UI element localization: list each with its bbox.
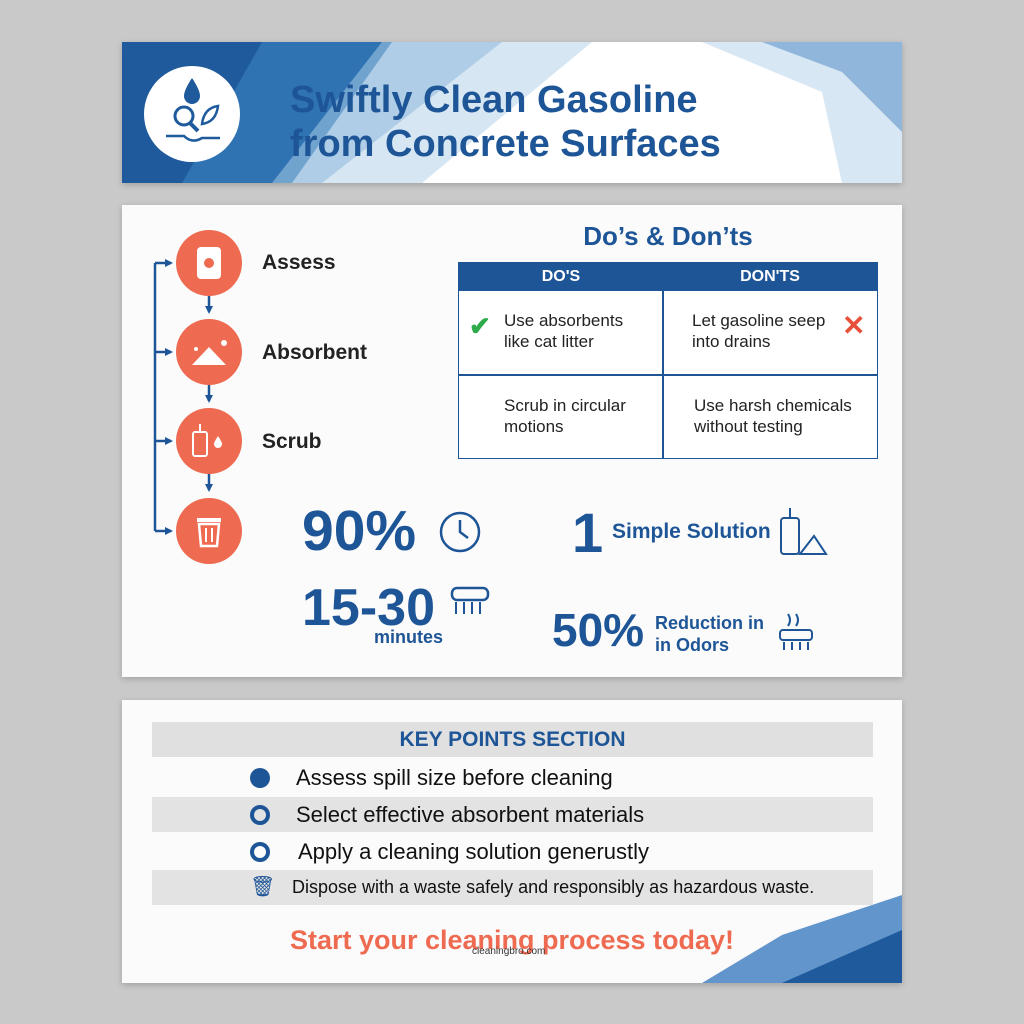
key point 2: Select effective absorbent materials	[296, 802, 644, 827]
text: Scrub	[262, 430, 322, 453]
flow connector arrows	[154, 259, 213, 535]
table: dos and donts: like cat litter	[504, 332, 594, 351]
step: Assess	[176, 230, 242, 296]
stat: 50% reduction: 50%	[552, 604, 644, 656]
text: minutes	[374, 627, 443, 647]
table: dos and donts: into drains	[692, 332, 770, 351]
table: dos and donts: motions	[504, 417, 564, 436]
header banner	[122, 42, 902, 183]
table: dos and donts: Let gasoline seep	[692, 311, 825, 330]
step: Scrub	[176, 408, 242, 474]
table: dos and donts: DO'S	[542, 268, 580, 285]
stat: 15-30 minutes: 15-30	[302, 579, 435, 637]
icon: drop, magnifier, leaf	[144, 66, 240, 162]
key point 4: Dispose with a waste safely and responsibly as hazardous waste.	[292, 877, 814, 897]
text: in Odors	[655, 635, 729, 655]
stat: 1 simple solution: 1	[572, 501, 603, 564]
call to action: Start your cleaning process today!	[290, 925, 734, 955]
step: dispose	[176, 498, 242, 564]
icon: brush odor	[779, 614, 813, 650]
key point 2	[152, 797, 873, 832]
table: dos and donts: without testing	[694, 417, 803, 436]
panel: process and stats	[122, 205, 902, 677]
key point 1: Assess spill size before cleaning	[296, 765, 613, 790]
table: dos and donts	[458, 262, 878, 459]
title: Swiftly Clean Gasoline	[290, 79, 698, 121]
key point 4: 🗑	[250, 876, 275, 898]
panel: key points	[122, 700, 902, 983]
table: dos and donts: DON'TS	[740, 268, 800, 285]
heading: dos and donts: Do’s & Don’ts	[583, 221, 753, 251]
icon: clock	[440, 512, 480, 552]
table: dos and donts: Use harsh chemicals	[694, 396, 852, 415]
heading: key points section	[152, 722, 873, 757]
stat: 90%: 90%	[302, 499, 416, 563]
footer url: cleaningbro.com	[472, 946, 545, 957]
table: dos and donts: Scrub in circular	[504, 396, 626, 415]
key point 3: Apply a cleaning solution generustly	[298, 839, 649, 864]
text: Assess	[262, 251, 336, 274]
text: Simple Solution	[612, 520, 771, 543]
icon: spray bottle	[780, 508, 828, 555]
text: Reduction in	[655, 613, 764, 633]
icon: cross: ✕	[842, 310, 865, 341]
title: from Concrete Surfaces	[290, 123, 721, 165]
table: dos and donts: Use absorbents	[504, 311, 623, 330]
key point 4	[152, 870, 873, 905]
step: Absorbent	[176, 319, 242, 385]
title	[290, 79, 721, 165]
icon: brush	[450, 586, 490, 614]
text: Absorbent	[262, 341, 367, 364]
icon: check: ✔	[469, 311, 491, 341]
heading: key points section: KEY POINTS SECTION	[400, 728, 626, 751]
